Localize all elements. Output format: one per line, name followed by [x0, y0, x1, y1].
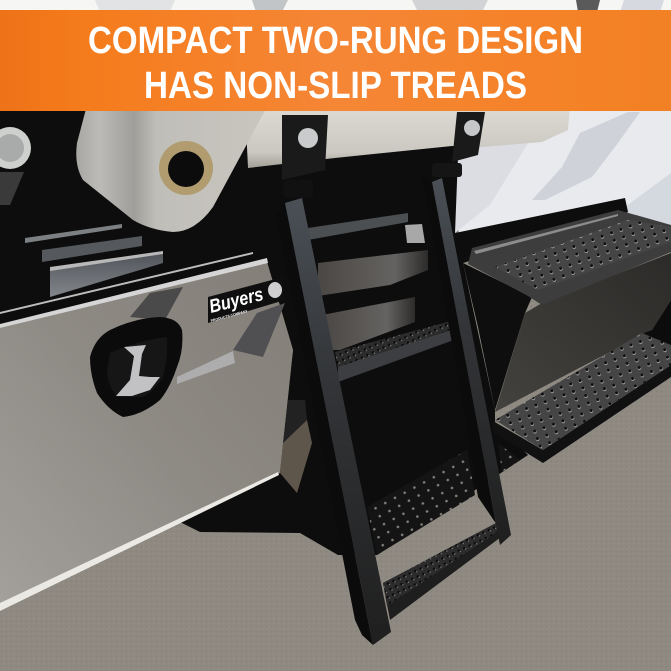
middle rung lit edge — [338, 327, 462, 382]
top strip behind banner — [0, 0, 671, 12]
lower rung — [383, 522, 501, 620]
Buyers logo: PRODUCTS COMPANY — [210, 309, 249, 323]
right hinge — [432, 163, 462, 177]
upper left dark grey frame — [0, 172, 24, 205]
frame highlight line — [0, 252, 253, 314]
rear panel sliver — [280, 400, 312, 493]
ladder right rail face — [432, 178, 511, 545]
ladder right rail side — [422, 175, 500, 545]
panel reflection of ladder — [130, 287, 285, 384]
exhaust wrap — [318, 224, 428, 350]
banner heading — [88, 20, 583, 107]
upper mounting plate right — [452, 112, 485, 162]
panel top highlight line — [0, 258, 268, 328]
banner heading: HAS NON-SLIP TREADS — [144, 65, 527, 107]
banner heading: COMPACT TWO-RUNG DESIGN — [88, 20, 583, 62]
upper mounting bolt left — [298, 128, 318, 148]
upper mounting bolt right — [464, 120, 480, 136]
upper mounting plate left — [282, 115, 328, 180]
chrome side panel reflecting the ground — [0, 262, 293, 605]
top cross bar — [308, 213, 408, 240]
left hinge — [283, 180, 313, 198]
aluminum bracket — [76, 105, 268, 232]
panel bottom white edge — [0, 472, 279, 611]
Buyers logo — [207, 277, 285, 323]
ladder left rail face — [285, 198, 391, 645]
mechanism rails on frame — [25, 224, 163, 297]
ladder — [276, 112, 511, 645]
Buyers logo: Buyers — [207, 284, 266, 318]
tank — [245, 105, 570, 168]
ladder left rail side — [276, 203, 373, 645]
white truck body — [440, 105, 671, 240]
orange banner — [0, 10, 671, 111]
left bolt — [0, 127, 31, 169]
bolt bushing on the bracket — [159, 141, 213, 195]
lit perforated shadow on ground — [367, 443, 520, 555]
dark truck underside and shadow — [0, 105, 628, 555]
middle rung tread — [335, 320, 459, 368]
lower rung tread — [383, 522, 500, 606]
right running board steps — [463, 210, 671, 463]
grab handle — [90, 317, 182, 417]
